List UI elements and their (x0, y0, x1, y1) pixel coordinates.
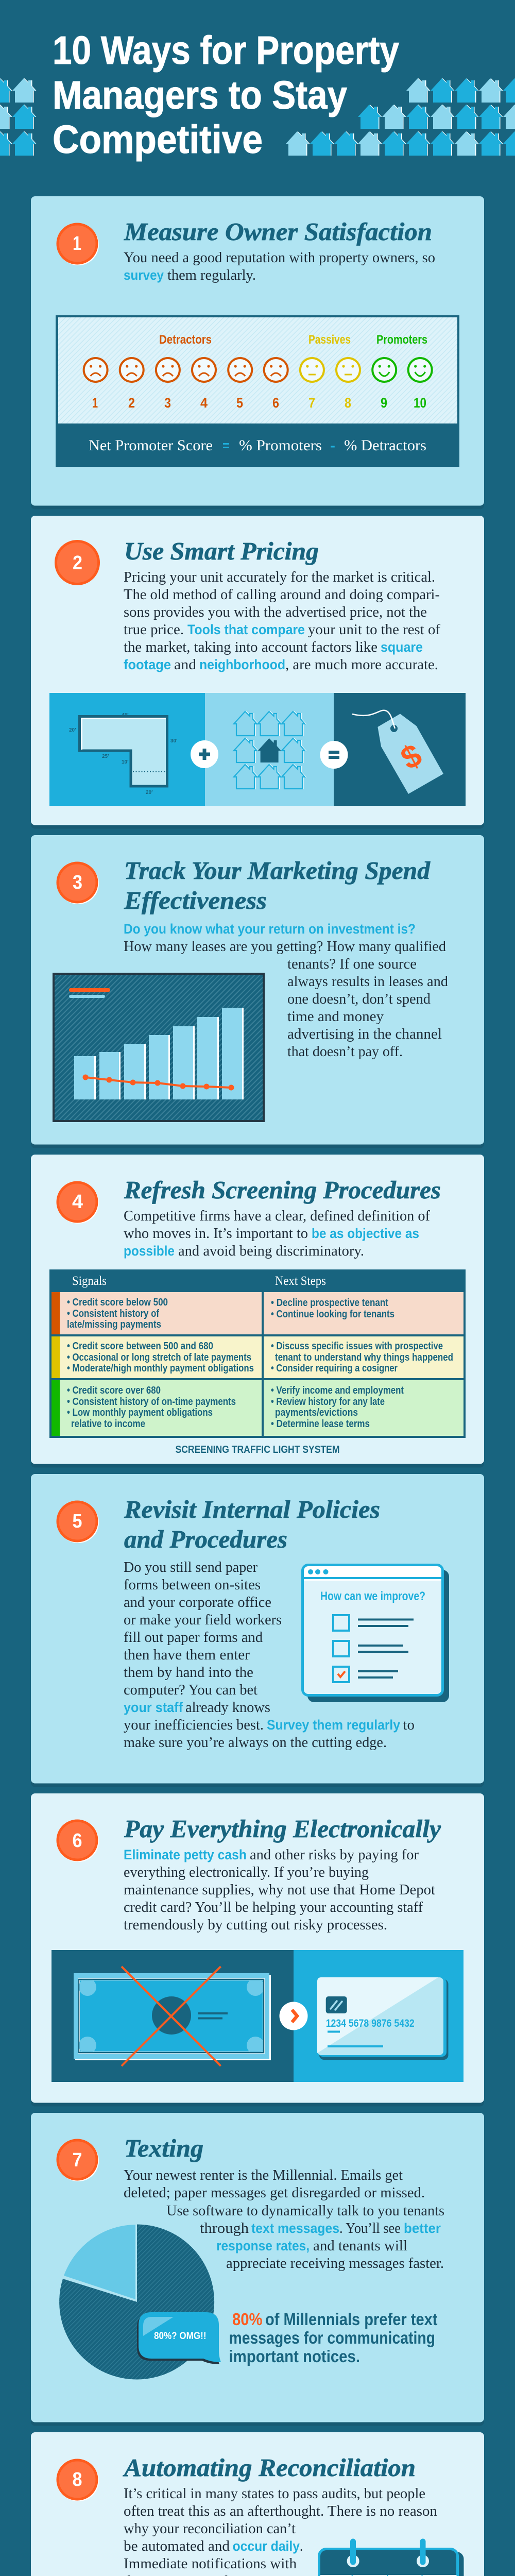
screening table (49, 1269, 466, 1438)
plus sign (191, 740, 218, 768)
body text 5: then have them enter (124, 1647, 250, 1663)
yellow row: • Occasional or long stretch of late payments (67, 1352, 251, 1363)
score numbers: 8 (345, 395, 351, 411)
number badge 5 (58, 1502, 99, 1543)
body text 2: and (174, 656, 197, 673)
panel: 8 automating reconciliation (31, 2432, 484, 2576)
score numbers: 10 (414, 395, 426, 411)
green row (52, 1380, 464, 1436)
body text 7: appreciate receiving messages faster. (226, 2255, 444, 2272)
number badge 1 (58, 224, 99, 265)
heading 3 (124, 856, 431, 914)
number badge 2: 2 (73, 552, 82, 574)
credit card: 1234 5678 9876 5432 (326, 2018, 415, 2029)
body text 2: Pricing your unit accurately for the market is critical. (124, 569, 435, 585)
body text 2: The old method of calling around and doing compari- (124, 586, 440, 603)
number badge 4 (58, 1182, 99, 1224)
body text 2: your unit to the rest of (308, 621, 440, 638)
panel: 3 track marketing spend (31, 835, 484, 1148)
credit card (317, 1977, 448, 2060)
floor plan: 30′ (170, 738, 178, 744)
body text 7: better (404, 2221, 441, 2236)
body text 3: always results in leases and (287, 973, 448, 990)
green row: • Consistent history of on-time payments (67, 1396, 236, 1408)
number badge 6 (58, 1821, 99, 1862)
green row: payments/evictions (275, 1407, 358, 1418)
body text 5 (124, 1559, 415, 1751)
group labels (159, 333, 427, 347)
body text 1: You need a good reputation with property owners, so (124, 249, 435, 266)
window heading: How can we improve? (320, 1589, 425, 1603)
number badge 3 (58, 863, 99, 904)
nps formula: Net Promoter Score (89, 437, 213, 454)
panel: 1 measure owner satisfaction (31, 196, 484, 509)
smiley faces (84, 358, 432, 382)
nps formula (89, 437, 426, 454)
number badge 5: 5 (72, 1511, 82, 1532)
score numbers (92, 395, 426, 411)
neighbourhood houses (234, 711, 306, 789)
body text 6: Eliminate petty cash (124, 1847, 247, 1862)
table header: Next Steps (275, 1274, 326, 1288)
body text 6: credit card? You’ll be helping your accounting staff (124, 1899, 423, 1916)
body text 8: be automated and (124, 2538, 230, 2554)
body text 6: maintenance supplies, why not use that Home Depot (124, 1882, 435, 1898)
group labels: Detractors (159, 333, 212, 347)
body text 5: them by hand into the (124, 1664, 253, 1681)
body text 5: or make your field workers (124, 1612, 282, 1628)
body text 8: Immediate notifications with (124, 2555, 297, 2572)
trend line (82, 1075, 234, 1090)
red row: • Decline prospective tenant (271, 1297, 388, 1309)
body text 5: your inefficiencies best. (124, 1717, 264, 1733)
body text 5: and your corporate office (124, 1594, 271, 1611)
body text 2: square (381, 639, 423, 655)
nps formula: % Detractors (344, 437, 426, 454)
group labels: Passives (308, 333, 351, 347)
number badge 8 (58, 2460, 99, 2501)
yellow row: • Discuss specific issues with prospective (271, 1341, 443, 1352)
body text 6: tremendously by cutting out risky processes. (124, 1917, 387, 1933)
body text 7: Your newest renter is the Millennial. Emails get (124, 2167, 403, 2183)
body text 4: and avoid being discriminatory. (178, 1243, 364, 1259)
body text 5: make sure you’re always on the cutting edge. (124, 1734, 387, 1751)
number badge 3: 3 (73, 872, 82, 893)
heading 2: Use Smart Pricing (124, 537, 319, 565)
body text 3: that doesn’t pay off. (287, 1043, 403, 1060)
green row: • Credit score over 680 (67, 1385, 161, 1396)
body text 7: and tenants will (313, 2238, 407, 2254)
body text 2: the market, taking into account factors like (124, 639, 377, 655)
body text 4: possible (124, 1243, 175, 1259)
body text 4: who moves in. It’s important to (124, 1225, 308, 1242)
body text 5: Do you still send paper (124, 1559, 258, 1575)
score numbers: 5 (236, 395, 243, 411)
statistic callout: messages for communicating (229, 2328, 435, 2347)
speech bubble: 80%? OMG!! (154, 2331, 206, 2342)
body text 5: already knows (185, 1699, 270, 1716)
body text 5: forms between on-sites (124, 1577, 261, 1593)
body text 2: neighborhood (199, 657, 285, 672)
number badge 1: 1 (73, 233, 81, 255)
table header: Signals (72, 1274, 107, 1288)
panel: 5 revisit internal policies (31, 1474, 484, 1787)
statistic callout (229, 2310, 438, 2366)
green row: • Review history for any late (271, 1396, 385, 1408)
equals sign (320, 741, 348, 769)
title (53, 28, 399, 162)
heading 4: Refresh Screening Procedures (124, 1176, 441, 1204)
yellow row: tenant to understand why things happened (275, 1352, 453, 1363)
body text 8: occur daily (233, 2538, 300, 2554)
floor plan: 20′ (69, 727, 76, 733)
score numbers: 6 (272, 395, 279, 411)
price tag: $ (395, 737, 427, 777)
body text 1 (124, 249, 435, 283)
heading 7: Texting (124, 2134, 203, 2162)
body text 6 (124, 1846, 435, 1933)
body text 8: why your reconciliation can’t (124, 2520, 296, 2537)
group labels: Promoters (376, 333, 427, 347)
body text 3: one doesn’t, don’t spend (287, 991, 431, 1007)
green row: • Low monthly payment obligations (67, 1407, 213, 1418)
survey window illustration (303, 1565, 449, 1702)
body text 3: How many leases are you getting? How many qualified (124, 938, 446, 955)
body text 2: true price. (124, 621, 184, 638)
calendar illustration (318, 2539, 464, 2576)
number badge 2 (56, 541, 99, 584)
score numbers: 4 (200, 395, 208, 411)
table header (72, 1274, 326, 1288)
yellow row: • Moderate/high monthly payment obligations (67, 1363, 254, 1374)
red row: • Consistent history of (67, 1308, 159, 1319)
heading 3: Track Your Marketing Spend (124, 856, 431, 885)
payment graphic (52, 1950, 464, 2082)
body text 3: time and money (287, 1008, 384, 1025)
body text 2: sons provides you with the advertised price, not the (124, 604, 427, 620)
body text 3: tenants? If one source (287, 956, 417, 972)
floor plan: 10′ (122, 759, 129, 765)
score numbers: 2 (128, 395, 135, 411)
body text 1: them regularly. (167, 267, 256, 283)
statistic callout: of Millennials prefer text (265, 2310, 438, 2329)
body text 3 (124, 921, 448, 1060)
floor plan (69, 713, 178, 795)
score numbers: 7 (308, 395, 315, 411)
body text 8: . (300, 2538, 303, 2554)
panel: 4 refresh screening procedures (31, 1155, 484, 1467)
body text 2: Tools that compare (187, 622, 305, 637)
body text 7: Use software to dynamically talk to you tenants (166, 2202, 444, 2219)
body text 6: and other risks by paying for (250, 1846, 419, 1863)
red row: • Continue looking for tenants (271, 1309, 394, 1320)
pricing equation graphic (49, 693, 466, 806)
floor plan: 25′ (102, 754, 109, 759)
heading 8: Automating Reconciliation (123, 2453, 416, 2482)
panel: 6 pay everything electronically (31, 1793, 484, 2106)
nps formula: - (330, 438, 335, 453)
body text 7: through (200, 2220, 249, 2236)
body text 7 (124, 2167, 444, 2272)
pie chart (59, 2225, 214, 2379)
green row: • Verify income and employment (271, 1385, 404, 1396)
floor plan: 45′ (122, 713, 129, 718)
body text 3: Do you know what your return on investment is? (124, 921, 416, 937)
checkboxes (333, 1615, 414, 1682)
body text 5: fill out paper forms and (124, 1629, 263, 1646)
body text 1: survey (124, 267, 164, 283)
yellow row: • Credit score between 500 and 680 (67, 1341, 213, 1352)
statistic callout: important notices. (229, 2347, 360, 2366)
number badge 7 (58, 2140, 99, 2181)
body text 5: to (403, 1717, 415, 1733)
heading 5: and Procedures (124, 1525, 287, 1553)
body text 2: , are much more accurate. (285, 656, 438, 673)
heading 5: Revisit Internal Policies (124, 1495, 380, 1523)
heading 3: Effectiveness (124, 886, 267, 914)
body text 6: everything electronically. If you’re buying (124, 1864, 369, 1880)
body text 2 (124, 569, 440, 673)
yellow row: • Consider requiring a cosigner (271, 1363, 398, 1374)
score numbers: 3 (164, 395, 171, 411)
table caption: SCREENING TRAFFIC LIGHT SYSTEM (175, 1444, 340, 1455)
heading 6: Pay Everything Electronically (124, 1815, 441, 1843)
speech bubble (137, 2312, 221, 2364)
red row (52, 1292, 464, 1334)
body text 7: deleted; paper messages get disregarded or missed. (124, 2184, 425, 2201)
body text 4: be as objective as (312, 1226, 419, 1241)
score numbers: 1 (92, 395, 98, 411)
body text 5: Survey them regularly (267, 1717, 400, 1733)
chart legend (69, 988, 110, 998)
body text 4 (124, 1208, 430, 1259)
body text 7: response rates, (216, 2238, 310, 2253)
green row: relative to income (71, 1418, 145, 1430)
panel: 2 use smart pricing (31, 516, 484, 828)
panel: 7 texting (31, 2113, 484, 2426)
nps formula: % Promoters (239, 437, 322, 454)
body text 4: Competitive firms have a clear, defined definition of (124, 1208, 430, 1224)
number badge 6: 6 (72, 1830, 82, 1852)
net promoter score panel (56, 315, 459, 467)
body text 8: It’s critical in many states to pass audits, but people (124, 2485, 425, 2502)
number badge 8: 8 (72, 2469, 82, 2490)
bars (74, 1008, 244, 1099)
price tag (352, 710, 443, 794)
floor plan: 20′ (146, 790, 153, 795)
body text 3: advertising in the channel (287, 1026, 442, 1042)
body text 5: computer? You can bet (124, 1682, 258, 1698)
heading 5 (124, 1495, 380, 1553)
score numbers: 9 (381, 395, 387, 411)
body text 8: often treat this as an afterthought. There is no reason (124, 2503, 437, 2519)
calendar rings (347, 2539, 429, 2567)
body text 8 (124, 2485, 437, 2576)
header: houses pattern (0, 78, 515, 156)
title: Competitive (53, 117, 263, 162)
body text 5: your staff (124, 1700, 183, 1715)
number badge 7: 7 (72, 2149, 82, 2171)
green row: • Determine lease terms (271, 1418, 370, 1430)
red row: • Credit score below 500 (67, 1297, 168, 1308)
body text 7: . You’ll see (339, 2220, 401, 2236)
nps formula: = (222, 438, 230, 453)
body text 2: footage (124, 657, 171, 672)
arrow circle (279, 2002, 308, 2030)
title: 10 Ways for Property (53, 28, 399, 73)
calendar grid (320, 2575, 457, 2576)
statistic callout: 80% (232, 2310, 263, 2329)
red row: late/missing payments (67, 1319, 161, 1330)
title: Managers to Stay (53, 73, 347, 117)
heading 1: Measure Owner Satisfaction (124, 217, 432, 246)
number badge 4: 4 (72, 1191, 83, 1213)
body text 7: text messages (251, 2221, 339, 2236)
bar and line chart (54, 974, 264, 1121)
yellow row (52, 1336, 464, 1378)
crossed-out banknote (74, 1967, 271, 2066)
